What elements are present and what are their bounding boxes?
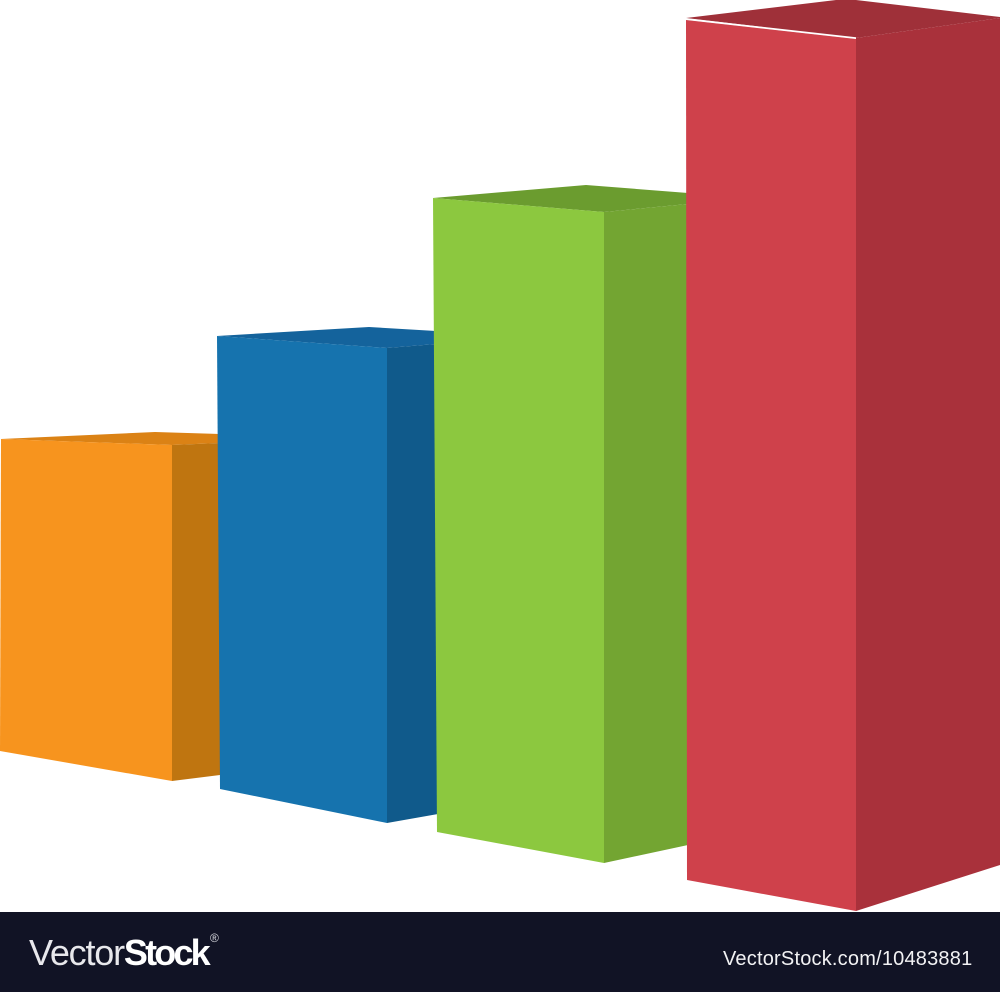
highlight on red bar top edge bbox=[686, 19, 856, 38]
red bar bbox=[686, 0, 1000, 911]
footer bar bbox=[0, 912, 1000, 992]
logo: ® bbox=[210, 931, 219, 945]
orange bar bbox=[0, 432, 220, 781]
image id: VectorStock.com/10483881 bbox=[723, 948, 972, 970]
logo: VectorStock bbox=[29, 932, 208, 973]
green bar bbox=[433, 185, 688, 863]
blue bar bbox=[217, 327, 438, 823]
